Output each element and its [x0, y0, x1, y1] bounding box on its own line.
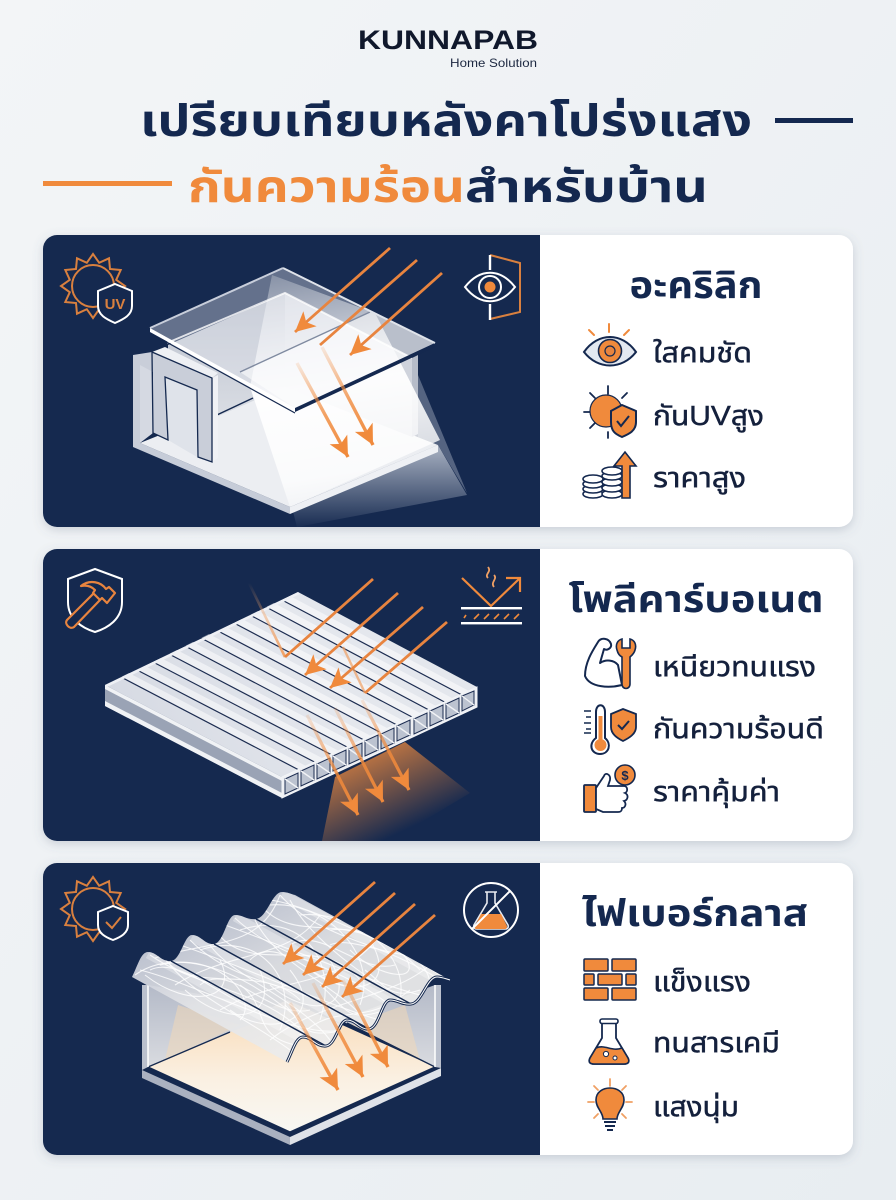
feature: high price — [583, 452, 746, 498]
panel: fiberglass — [43, 863, 853, 1155]
icon: flask — [589, 1019, 629, 1064]
icon: sun with UV shield: UV — [105, 296, 125, 313]
feature: value: ราคาคุ้มค่า — [653, 776, 780, 808]
logo — [358, 25, 538, 70]
icon: no chemicals — [464, 883, 518, 937]
illustration: corrugated fiberglass roof on box — [142, 985, 441, 1145]
arrows: diffused sunlight — [283, 882, 435, 1090]
icon: eye with clear panel — [465, 255, 520, 320]
icon: shield with hammer — [66, 569, 122, 632]
arrows: sunlight through acrylic — [295, 248, 442, 457]
illustration: twin-wall polycarbonate sheet — [105, 592, 477, 841]
arrows: sunlight reflected and filtered — [249, 579, 447, 815]
title — [43, 97, 853, 212]
title: กันความร้อน — [188, 163, 465, 212]
icon: light bulb — [588, 1079, 632, 1130]
panel: polycarbonate — [43, 549, 853, 841]
card background — [43, 235, 853, 527]
feature: UV protection: กันUVสูง — [653, 400, 764, 433]
icon: sun and shield — [584, 386, 636, 438]
card background — [43, 863, 853, 1155]
illustration: acrylic roof on house — [133, 268, 467, 527]
feature: heat protection: กันความร้อนดี — [653, 713, 824, 744]
feature: high price: ราคาสูง — [653, 462, 746, 495]
icon: bricks — [584, 959, 636, 1000]
card background — [43, 549, 853, 841]
feature: strong — [584, 959, 751, 1000]
navy illustration area — [43, 235, 540, 527]
heading: fiberglass: ไฟเบอร์กลาส — [582, 893, 808, 934]
icon: heat reflection — [461, 567, 522, 624]
icon: sun with check shield — [61, 877, 128, 941]
feature: UV protection — [584, 386, 764, 438]
icon: sun with UV shield — [61, 254, 132, 323]
title: เปรียบเทียบหลังคาโปร่งแสง — [140, 97, 752, 146]
icon: eye — [584, 324, 636, 366]
feature: soft light: แสงนุ่ม — [653, 1091, 739, 1123]
icon: thermometer and shield — [584, 705, 636, 754]
icon: coins and rising arrow — [583, 452, 636, 498]
logo: Home Solution — [450, 56, 537, 70]
feature: heat protection — [584, 705, 824, 754]
feature: clear — [584, 324, 752, 368]
panel: acrylic — [43, 235, 853, 527]
heading: acrylic: อะคริลิก — [630, 265, 762, 306]
feature: soft light — [588, 1079, 739, 1130]
roof sheet — [132, 892, 450, 1062]
heading: polycarbonate: โพลีคาร์บอเนต — [568, 579, 824, 620]
title: สำหรับบ้าน — [465, 163, 708, 212]
feature: tough: เหนียวทนแรง — [653, 651, 816, 682]
icon: thumbs up with coin: $ — [621, 768, 629, 783]
feature: value — [584, 765, 780, 812]
icon: thumbs up with coin — [584, 765, 635, 812]
navy illustration area — [43, 863, 540, 1155]
feature: strong: แข็งแรง — [653, 966, 751, 997]
icon: arm and wrench — [585, 639, 636, 688]
feature: clear: ใสคมชัด — [653, 337, 752, 368]
feature: chemical resistant — [589, 1019, 780, 1064]
feature: chemical resistant: ทนสารเคมี — [653, 1027, 780, 1058]
logo: KUNNAPAB — [358, 25, 538, 55]
navy illustration area — [43, 549, 540, 841]
feature: tough — [585, 639, 816, 688]
